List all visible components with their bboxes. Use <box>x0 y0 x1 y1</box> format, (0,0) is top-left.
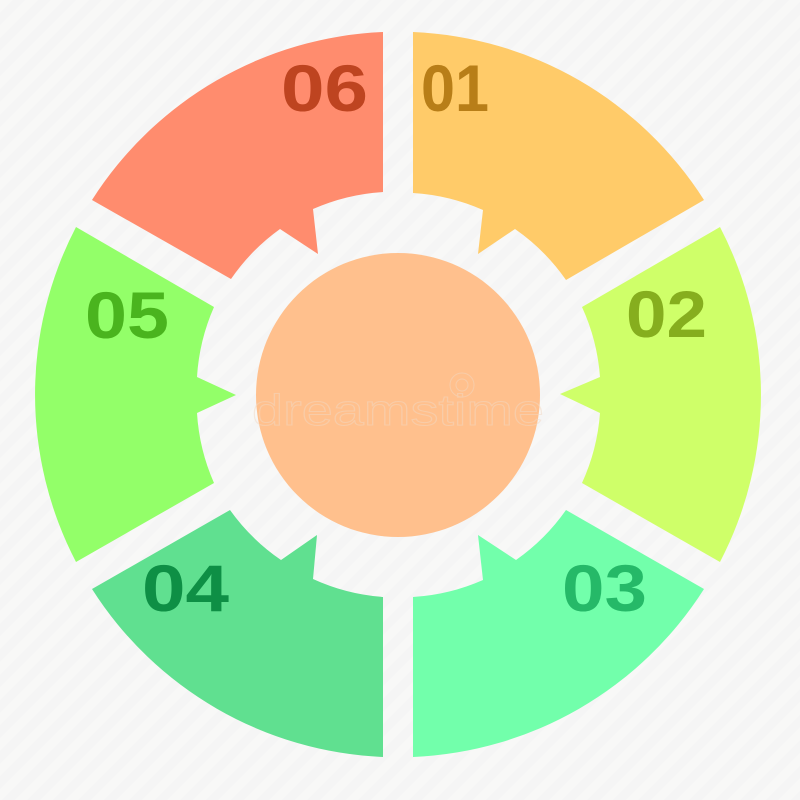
number 06: 06 <box>281 51 368 125</box>
watermark: dreamstime <box>252 386 544 435</box>
segment 06 <box>92 32 383 279</box>
number 05: 05 <box>85 278 169 352</box>
center circle <box>256 253 540 537</box>
segment 01 <box>413 32 704 280</box>
number 01: 01 <box>421 51 489 125</box>
segment 02 <box>560 227 761 562</box>
watermark <box>252 373 544 435</box>
segment 05 <box>35 227 236 562</box>
segment 03 <box>413 510 704 757</box>
number 02: 02 <box>626 277 707 351</box>
number 03: 03 <box>562 551 647 625</box>
segment 04 <box>92 510 383 757</box>
number 04: 04 <box>142 551 229 625</box>
